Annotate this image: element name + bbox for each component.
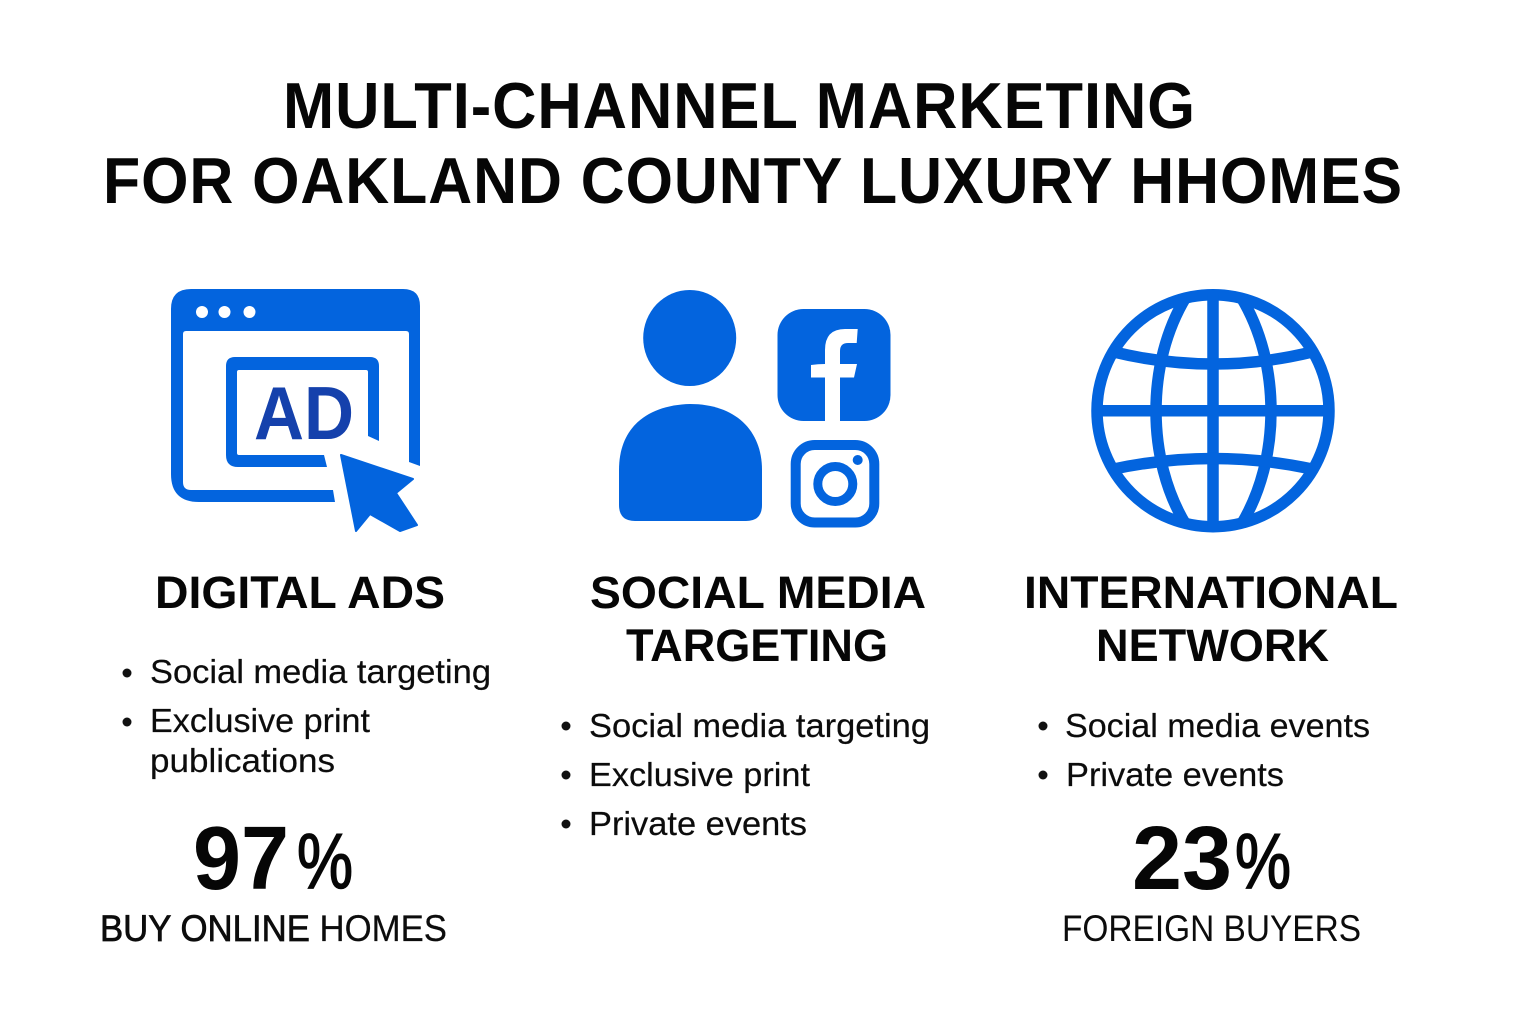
heading: social media targeting — [590, 567, 926, 671]
bullet list: social media targeting: Exclusive print — [589, 756, 810, 793]
bullet list: digital ads — [122, 653, 491, 779]
heading: social media targeting: TARGETING — [626, 620, 888, 671]
bullet list: digital ads: Exclusive print — [150, 702, 370, 739]
heading: social media targeting: SOCIAL MEDIA — [590, 567, 926, 618]
heading: international network — [1024, 567, 1398, 671]
stat: 23%: 23 — [1132, 809, 1232, 909]
bullet list: social media targeting — [562, 707, 930, 842]
bullet list: digital ads: Social media targeting — [150, 653, 491, 690]
bullet list: social media targeting: Social media targeting — [589, 707, 930, 744]
stat: 97% — [193, 809, 353, 909]
stat: 23% — [1132, 809, 1291, 909]
title — [103, 69, 1403, 217]
panel: international network — [1024, 295, 1398, 949]
heading: digital ads: DIGITAL ADS — [155, 567, 445, 618]
title: MULTI-CHANNEL MARKETING — [283, 69, 1196, 142]
stat label: buy online homes: BUY ONLINE HOMES — [100, 908, 447, 949]
heading: international network: INTERNATIONAL — [1024, 567, 1398, 618]
bullet list: social media targeting: Private events — [589, 805, 807, 842]
icon: globe — [1097, 295, 1329, 527]
panel: social media targeting — [562, 290, 930, 842]
bullet list: international network — [1038, 707, 1370, 793]
icon: browser ad with cursor: AD — [254, 371, 354, 455]
bullet list: international network: Private events — [1066, 756, 1284, 793]
title: FOR OAKLAND COUNTY LUXURY HHOMES — [103, 144, 1403, 217]
heading: international network: NETWORK — [1096, 620, 1329, 671]
stat: 97%: % — [297, 817, 353, 905]
bullet list: digital ads: publications — [150, 742, 335, 779]
stat: 23%: % — [1235, 817, 1291, 905]
panel: digital ads — [100, 289, 491, 949]
stat: 97%: 97 — [193, 809, 289, 909]
icon: browser ad with cursor — [171, 289, 420, 531]
icon: person with social logos — [619, 290, 890, 522]
stat label: foreign buyers: FOREIGN BUYERS — [1062, 908, 1361, 949]
bullet list: international network: Social media events — [1065, 707, 1370, 744]
